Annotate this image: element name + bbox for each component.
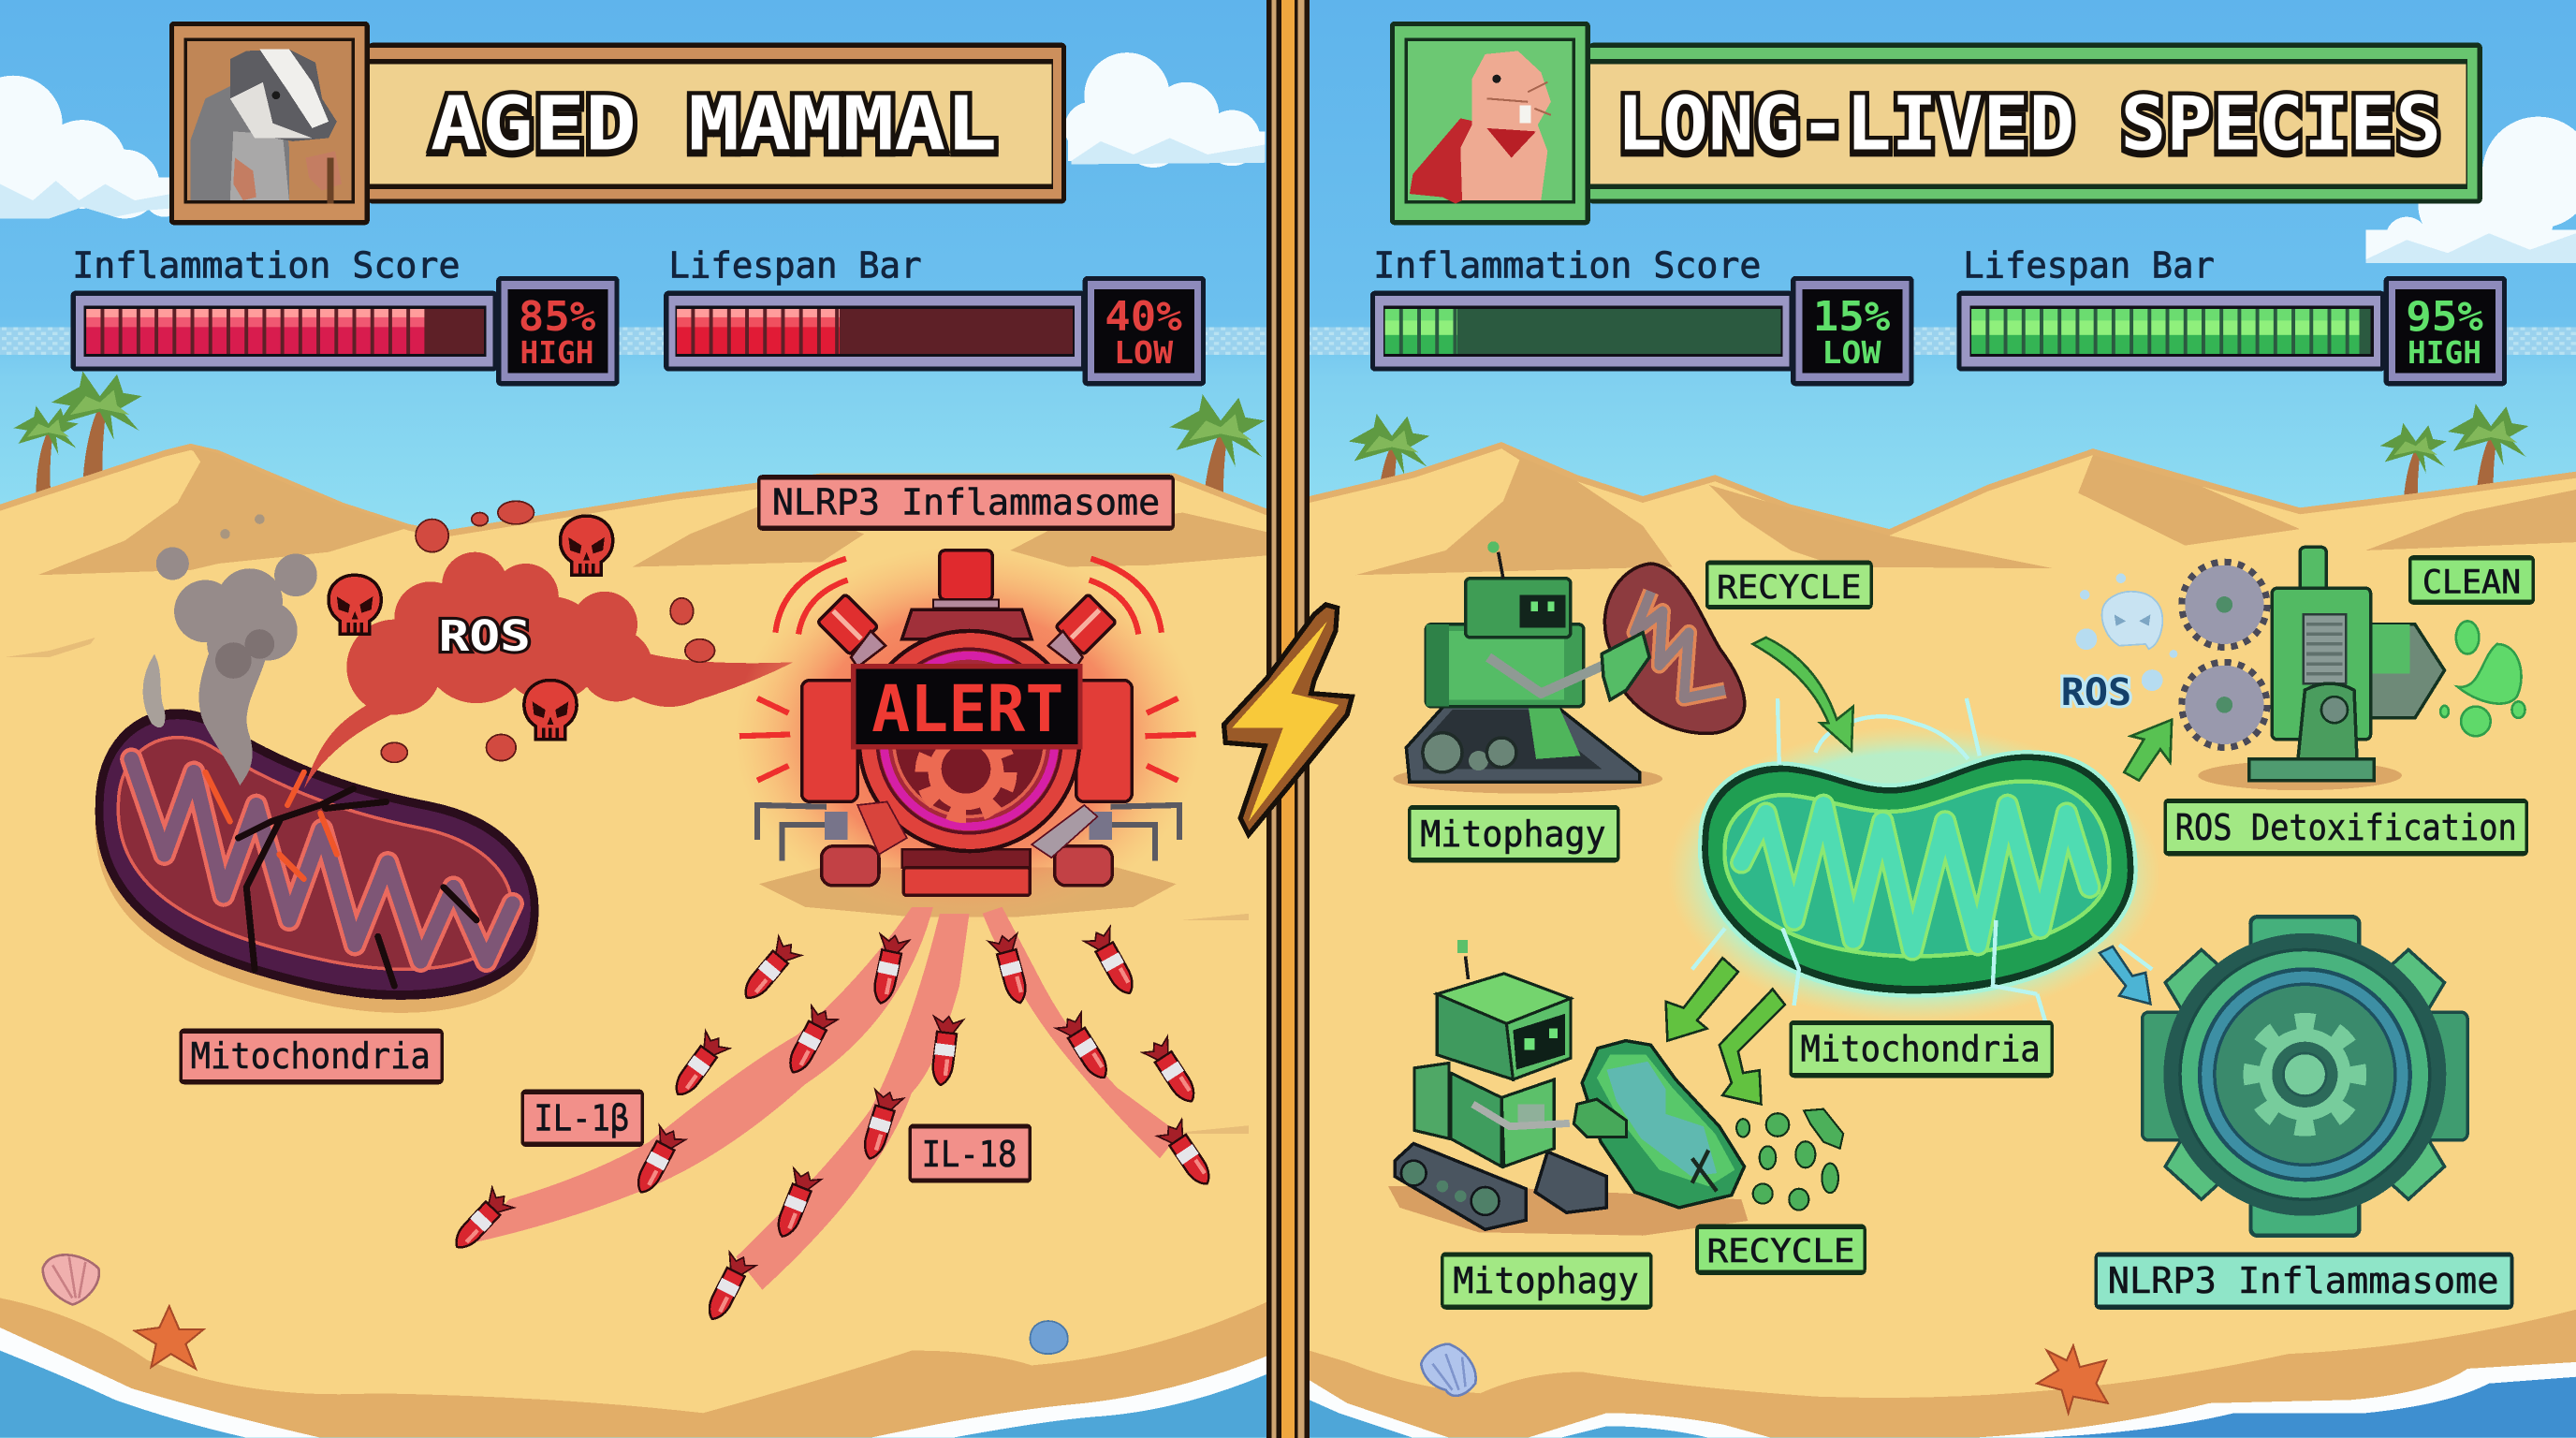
- feet: [822, 846, 1112, 886]
- header: aged mammal: [169, 22, 1066, 225]
- value box: 95% high: HIGH: [2408, 334, 2481, 371]
- label: ROS (blue): ROS: [2061, 670, 2131, 714]
- shell: pink: [43, 1255, 99, 1304]
- alarm arcs and sparks: [739, 559, 1196, 781]
- dunes: shaded faces: [37, 447, 1268, 575]
- side sticks: [857, 801, 907, 855]
- healthy scene: robot with damaged mitochondrion: [1393, 541, 1745, 794]
- bar: 85 percent: [71, 291, 498, 372]
- gear: [2252, 1022, 2358, 1127]
- wet sand band: [0, 1298, 1268, 1438]
- label: mitochondria (healthy): [1789, 1020, 2054, 1078]
- fragments: [1736, 1109, 1843, 1211]
- portrait: naked mole rat: [1390, 22, 1590, 225]
- shadow: [1388, 1186, 1748, 1236]
- value box: 40% low: 40%: [1105, 293, 1182, 341]
- palm trees: left pair: [14, 371, 142, 493]
- heading: Lifespan Bar: [668, 245, 922, 287]
- saw blades: [2183, 564, 2265, 746]
- old mitochondrion: [1604, 564, 1745, 733]
- cracks and lava: [205, 772, 476, 986]
- arrow: blue to inflammasome: [2100, 946, 2150, 1004]
- label: recycle (bottom): RECYCLE: [1707, 1232, 1854, 1270]
- robot tracks: [1406, 697, 1640, 782]
- label: recycle (bottom): [1695, 1224, 1866, 1275]
- label: NLRP3 inflammasome (aged): NLRP3 Inflammasome: [772, 481, 1160, 523]
- cloud: top left: [0, 76, 187, 218]
- beach sand: [1310, 448, 2576, 1438]
- healthy scene: ROS skull being cleaned: [2076, 574, 2177, 691]
- ROS droplets: [381, 501, 714, 762]
- cloud: right: [2365, 117, 2576, 263]
- bar: 40 percent: [664, 291, 1086, 372]
- palm tree: left: [1349, 414, 1429, 522]
- label: ROS detoxification: [2163, 799, 2528, 856]
- horns: [817, 594, 878, 654]
- stats: long-lived inflammation: [1370, 245, 1914, 386]
- water: right: [871, 1356, 1268, 1438]
- corner fins: [2165, 949, 2445, 1199]
- value box: 40% low: LOW: [1114, 334, 1174, 371]
- healthy scene: clean green droplets: [2440, 621, 2525, 736]
- side plates: [2143, 1012, 2188, 1140]
- value box: 40% low: [1083, 276, 1206, 386]
- label: IL-1β: [520, 1090, 644, 1147]
- label: mitophagy (top): [1408, 805, 1620, 862]
- machine body: [2272, 588, 2371, 740]
- rings: [2163, 933, 2446, 1216]
- value box: 95% high: [2384, 276, 2507, 386]
- shadow: [2198, 761, 2402, 790]
- label: mitochondria (aged): Mitochondria: [191, 1035, 431, 1078]
- healthy scene: robot with fragmenting mitochondrion: [1388, 940, 1843, 1236]
- dune outline: [1310, 442, 2576, 690]
- arrow: down-left to robot: [1666, 958, 1738, 1041]
- healthy scene: mitochondria: [1667, 698, 2160, 1027]
- dune outline: [0, 444, 1268, 690]
- healthy scene: ROS detox machine: [2183, 547, 2445, 790]
- label: NLRP3 inflammasome (healthy): NLRP3 Inflammasome: [2108, 1260, 2498, 1302]
- base: [902, 849, 1030, 895]
- arrow: toward ROS detox: [2124, 720, 2172, 781]
- ROS label: ROS: [439, 611, 531, 661]
- label: mitophagy (bottom): [1441, 1252, 1653, 1310]
- arrow: down to fragments: [1720, 990, 1785, 1104]
- aged scene: cytokine rockets: [446, 926, 1220, 1326]
- core: [859, 631, 1079, 851]
- aged scene: NLRP3 alert machine: [735, 546, 1201, 923]
- title: AGED MAMMAL: [431, 81, 997, 168]
- label: mitochondria (healthy): Mitochondria: [1801, 1029, 2041, 1071]
- value box: 15% low: 15%: [1813, 293, 1891, 341]
- aged scene: ROS cloud: [304, 501, 794, 788]
- panel: long-lived species background: [1310, 0, 2576, 1438]
- starfish: right: [2037, 1345, 2108, 1413]
- label: ROS detoxification: ROS Detoxification: [2175, 807, 2517, 849]
- label: recycle (top): RECYCLE: [1717, 568, 1862, 607]
- broken mitochondrion: [1582, 1041, 1745, 1208]
- banner bar: [368, 43, 1066, 204]
- wet sand band: [1310, 1310, 2576, 1438]
- aged scene: cytokine beams: [468, 907, 1179, 1290]
- front track: [1395, 1143, 1526, 1229]
- value box: 85% high: [496, 276, 620, 386]
- robot head: [1466, 579, 1571, 638]
- value box: 85% high: HIGH: [520, 334, 594, 371]
- claws: [757, 805, 1179, 861]
- palm trees: right pair: [2380, 404, 2528, 513]
- arrow: recycle to healthy mitochondria: [1753, 638, 1853, 751]
- icon: lightning bolt: [1224, 605, 1352, 835]
- bar: 15 percent: [1370, 291, 1794, 372]
- value box: 15% low: LOW: [1822, 334, 1882, 371]
- antenna: [1499, 552, 1503, 579]
- robot arm: [1488, 657, 1606, 694]
- glow: [1667, 726, 2160, 1022]
- heading: Inflammation Score: [72, 245, 460, 287]
- stats: aged mammal inflammation: [71, 245, 620, 386]
- stats: long-lived lifespan: [1956, 245, 2507, 386]
- panel: aged mammal background: [0, 0, 1268, 1438]
- label: clean: CLEAN: [2422, 564, 2521, 602]
- gear: [922, 727, 1010, 816]
- label: NLRP3 inflammasome (healthy): [2095, 1252, 2513, 1310]
- drill: [2371, 624, 2445, 718]
- top and bottom caps: [2250, 917, 2359, 983]
- electric arcs: [1692, 698, 2152, 1027]
- robot hand: [1573, 1099, 1627, 1137]
- label: recycle (top): [1705, 560, 1873, 609]
- value box: 15% low: [1791, 276, 1914, 386]
- skull icons: [329, 516, 613, 740]
- label: IL-18: [909, 1123, 1032, 1183]
- top nozzle: [2300, 547, 2326, 596]
- banner bar: [1588, 43, 2482, 204]
- label: clean: [2408, 555, 2535, 605]
- label: IL-18: IL-18: [922, 1134, 1017, 1176]
- rear track: [1535, 1152, 1606, 1212]
- cristae: [1741, 805, 2089, 949]
- sand streaks: [5, 638, 1249, 1134]
- side pods: [802, 681, 857, 801]
- water: right: [1975, 1362, 2576, 1438]
- antenna: [1466, 956, 1469, 979]
- aged scene: smoke: [143, 514, 317, 785]
- healthy scene: calm NLRP3 inflammasome: [2143, 917, 2467, 1236]
- heading: Inflammation Score: [1373, 245, 1761, 287]
- palm tree: right: [1170, 394, 1265, 522]
- dunes: shaded faces: [1355, 448, 2576, 575]
- beacon: [940, 550, 992, 600]
- robot arm: [1472, 1104, 1570, 1126]
- label: IL-1β: IL-1β: [534, 1097, 629, 1139]
- water: left: [0, 1328, 320, 1438]
- water: left: [1310, 1380, 1771, 1438]
- pedestal: [2297, 683, 2358, 772]
- header: long-lived species: [1390, 22, 2482, 225]
- aged scene: damaged mitochondria: [95, 709, 539, 1013]
- robot body: [1426, 624, 1584, 707]
- portrait: badger: [169, 22, 370, 225]
- value box: 85% high: 85%: [519, 293, 596, 341]
- label: mitophagy (bottom): Mitophagy: [1453, 1260, 1639, 1302]
- label: mitophagy (top): Mitophagy: [1420, 814, 1606, 856]
- cloud: top right: [1064, 52, 1265, 168]
- heading: Lifespan Bar: [1963, 245, 2215, 287]
- shell: lavender: [1421, 1344, 1476, 1396]
- stats: aged mammal lifespan: [664, 245, 1206, 386]
- beach sand: [0, 450, 1268, 1438]
- robot body: [1414, 1064, 1554, 1167]
- title: LONG-LIVED SPECIES: [1617, 81, 2441, 168]
- shell: blue: [1030, 1321, 1068, 1354]
- value box: 95% high: 95%: [2406, 293, 2483, 341]
- shadow: [1393, 764, 1662, 794]
- bar: 95 percent: [1956, 291, 2385, 372]
- center divider: [1266, 0, 1310, 1438]
- starfish: left: [135, 1306, 204, 1369]
- alert sign: ALERT: [871, 672, 1063, 747]
- robot head: [1437, 974, 1571, 1079]
